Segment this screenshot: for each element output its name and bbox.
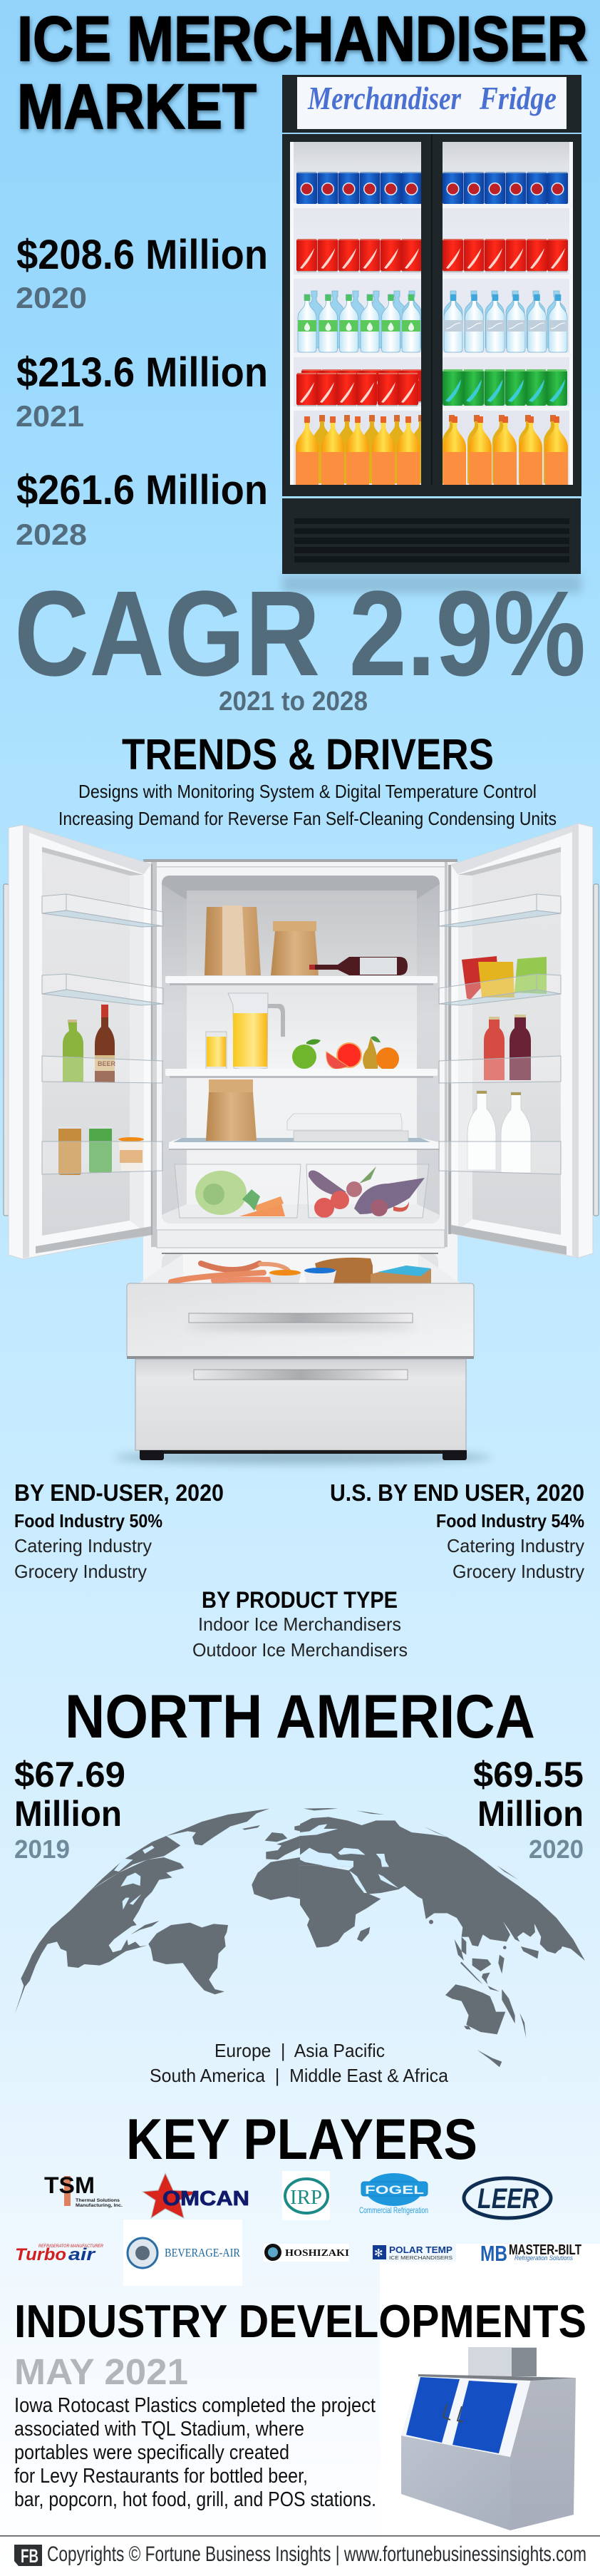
- logo: IRP: [282, 2171, 330, 2220]
- text: development description: bar, popcorn, hot food, grill, and POS stations.: [14, 2488, 376, 2511]
- footer logo: [14, 2545, 42, 2567]
- right door shelves: [439, 894, 561, 1174]
- logo: Turbo Air: Turbo: [15, 2245, 66, 2264]
- text: other regions: Europe | Asia Pacific: [214, 2040, 385, 2061]
- shelf: second glass shelf: [165, 1069, 438, 1078]
- text: development description: [14, 2394, 376, 2511]
- logo: Leer: LEER: [477, 2183, 539, 2215]
- shelf: third glass shelf with bag and pizza boxes: [169, 1079, 440, 1150]
- segment: U.S. by end user: U.S. BY END USER, 2020: [330, 1479, 584, 1506]
- logo: Polar Temp: [373, 2244, 452, 2261]
- stat: 2021 market value: [16, 349, 268, 433]
- shelf: juice and fruit: [206, 993, 399, 1071]
- text: trends and drivers list: [58, 781, 557, 829]
- crisper drawer: vegetables: [195, 1166, 425, 1218]
- logo: Polar Temp: ICE MERCHANDISERS: [389, 2254, 452, 2261]
- stat: 2020 market value: [16, 232, 268, 314]
- sign panel: Fridge: [479, 80, 557, 116]
- logo: Hoshizaki: [264, 2244, 349, 2262]
- logo: Hoshizaki: HOSHIZAKI: [285, 2248, 349, 2259]
- logo: Turbo Air: [15, 2244, 104, 2264]
- text: development description: for Levy Restaurants for bottled beer,: [14, 2465, 308, 2488]
- sign panel: [297, 77, 567, 129]
- heading: trends and drivers: TRENDS & DRIVERS: [122, 730, 494, 779]
- freezer drawer front: [127, 1283, 474, 1359]
- left door items: [58, 1005, 144, 1175]
- logo: Turbo Air: REFRIGERATOR MANUFACTURER: [38, 2244, 104, 2249]
- date: MAY 2021: [14, 2351, 188, 2392]
- logo: Beverage-Air: BEVERAGE-AIR: [165, 2246, 241, 2259]
- row: orange bottles: [296, 415, 568, 485]
- lower drawer: [135, 1359, 466, 1450]
- stat: 2019 regional value: Million: [14, 1794, 122, 1834]
- segment: by end-user: BY END-USER, 2020: [14, 1479, 224, 1506]
- stat: 2019 regional value: [14, 1755, 125, 1864]
- segment: by product type: BY PRODUCT TYPE: [202, 1587, 398, 1613]
- text: trends and drivers list: Designs with Monitoring System & Digital Temperature Control: [78, 781, 537, 802]
- logo: Fogel: [359, 2173, 428, 2215]
- row: blue cans: [296, 172, 568, 204]
- stat: 2021 market value: 2021: [16, 399, 84, 433]
- logo: Fogel: FOGEL: [365, 2183, 424, 2197]
- row: red cans: [296, 239, 568, 272]
- crisper bins: [175, 1164, 429, 1218]
- logo: Master-Bilt: Refrigeration Solutions: [514, 2254, 573, 2262]
- row: water bottles: [298, 291, 567, 352]
- logo: Fogel: Commercial Refrigeration: [359, 2205, 428, 2215]
- door centre post: [421, 134, 443, 496]
- logo: Omcan: OMCAN: [162, 2187, 249, 2210]
- segment: by end-user: [14, 1479, 224, 1582]
- stat: 2028 market value: [16, 467, 268, 551]
- stat: 2020 market value: $208.6 Million: [16, 232, 268, 278]
- stat: 2020 market value: 2020: [16, 281, 87, 314]
- illustration: open refrigerator: [4, 823, 599, 1464]
- segment: U.S. by end user: Food Industry 54%: [436, 1510, 584, 1531]
- logo: Polar Temp: ✻: [374, 2247, 383, 2259]
- logo: TSM: [44, 2172, 123, 2208]
- title: MARKET: [17, 71, 257, 142]
- logo: Turbo Air: air: [68, 2245, 96, 2264]
- footer rule: [0, 2535, 600, 2537]
- fridge feet: [140, 1450, 467, 1460]
- stat: 2019 regional value: $67.69: [14, 1755, 125, 1795]
- right door items: [462, 956, 547, 1173]
- stat: 2028 market value: $261.6 Million: [16, 467, 268, 513]
- stat: 2020 regional value: $69.55: [473, 1755, 584, 1795]
- shelf: first glass shelf: [165, 976, 438, 985]
- illustration: ice merchandiser: [401, 2347, 576, 2530]
- segment: by product type: Outdoor Ice Merchandisers: [192, 1639, 408, 1661]
- stat: 2021 market value: $213.6 Million: [16, 349, 268, 396]
- logo: Omcan: [143, 2173, 249, 2218]
- text: development description: Iowa Rotocast Plastics completed the project: [14, 2394, 376, 2417]
- stat: 2028 market value: 2028: [16, 518, 87, 551]
- left door items: BEER: [98, 1060, 116, 1067]
- logo: TSM: Manufacturing, Inc.: [76, 2203, 123, 2208]
- freezer drawer contents: [171, 1258, 431, 1283]
- row: red and green cans: [296, 369, 567, 406]
- text: other regions: [150, 2040, 449, 2086]
- logo: Polar Temp: POLAR TEMP: [389, 2244, 452, 2255]
- left door: [4, 825, 152, 1259]
- footer logo: FB: [21, 2545, 38, 2567]
- text: development description: portables were specifically created: [14, 2441, 289, 2464]
- segment: by product type: [192, 1587, 408, 1661]
- shelf: top items: [205, 905, 408, 975]
- segment: U.S. by end user: [330, 1479, 584, 1582]
- logo: Master-Bilt: [480, 2241, 581, 2266]
- logo: Beverage-Air: [123, 2220, 242, 2286]
- stat: 2020 regional value: 2020: [529, 1834, 584, 1864]
- left door shelves: [42, 894, 163, 1174]
- text: development description: associated with TQL Stadium, where: [14, 2418, 304, 2441]
- fridge body: [114, 859, 492, 1464]
- segment: U.S. by end user: Grocery Industry: [452, 1561, 584, 1582]
- segment: U.S. by end user: Catering Industry: [447, 1535, 584, 1556]
- logo: TSM: Thermal Solutions: [76, 2198, 120, 2203]
- CAGR period: 2021 to 2028: [219, 687, 368, 717]
- segment: by end-user: Grocery Industry: [14, 1561, 147, 1582]
- logo: TSM: TSM: [44, 2172, 95, 2198]
- stat: 2020 regional value: Million: [477, 1794, 584, 1834]
- logo: Leer: [464, 2178, 551, 2218]
- title: [17, 3, 588, 142]
- segment: by end-user: Catering Industry: [14, 1535, 152, 1556]
- segment: by product type: Indoor Ice Merchandisers: [198, 1613, 401, 1635]
- illustration: merchandiser fridge: [282, 75, 581, 593]
- stat: 2020 regional value: [473, 1755, 584, 1864]
- map: world: [15, 1808, 585, 2067]
- right door: [448, 823, 599, 1258]
- logo: IRP: IRP: [290, 2186, 322, 2209]
- segment: by end-user: Food Industry 50%: [14, 1510, 162, 1531]
- base grille: [282, 498, 581, 574]
- stat: 2019 regional value: 2019: [14, 1834, 70, 1864]
- heading: north america: NORTH AMERICA: [65, 1683, 535, 1751]
- text: other regions: South America | Middle East & Africa: [150, 2065, 449, 2086]
- heading: key players: KEY PLAYERS: [126, 2108, 477, 2172]
- sign panel: Merchandiser: [307, 80, 462, 116]
- map: eurasia, africa and oceania: [300, 1808, 585, 2067]
- logo: Master-Bilt: MB: [480, 2241, 507, 2266]
- map: americas and west: [15, 1809, 300, 2014]
- shelf rails: [294, 203, 571, 411]
